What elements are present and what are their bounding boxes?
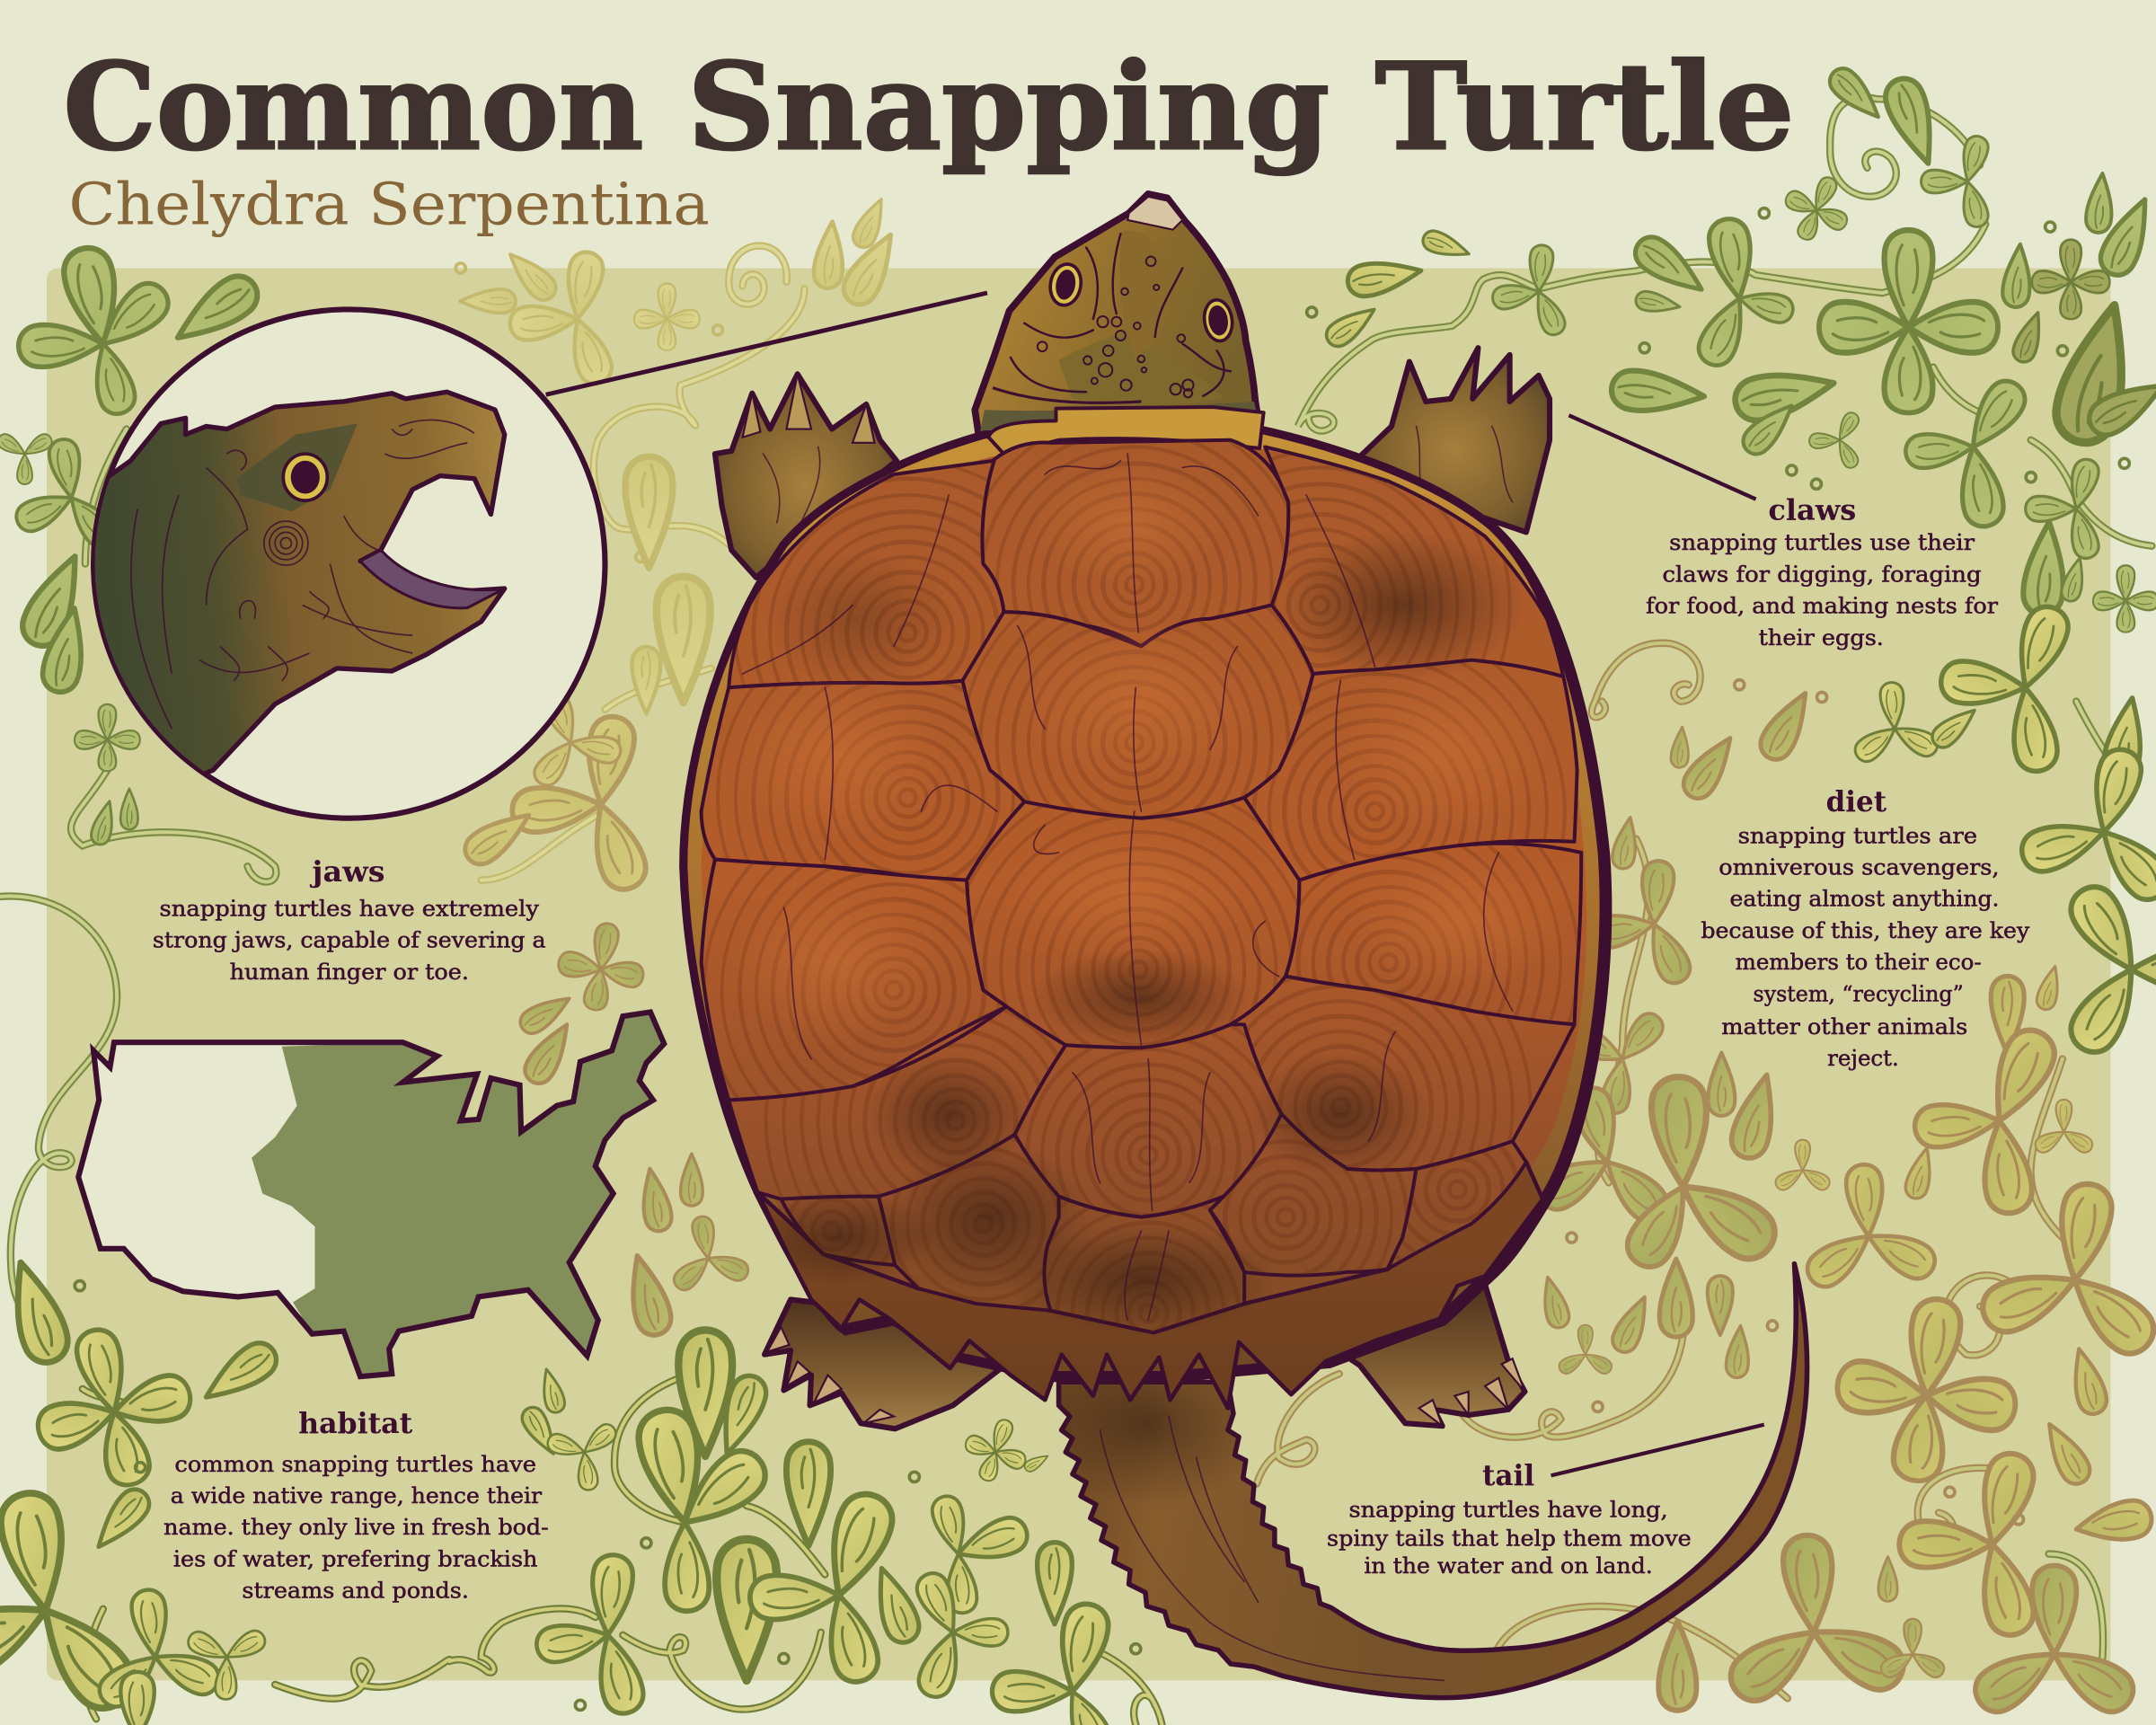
habitat range map xyxy=(78,1013,664,1376)
text block: claws xyxy=(1646,495,1999,650)
claws leader line xyxy=(1568,415,1756,500)
eye xyxy=(283,454,327,500)
text block: tail: in the water and on land. xyxy=(1364,1553,1653,1579)
shell rim xyxy=(684,429,1604,1376)
foliage: lower-left clovers xyxy=(0,916,1141,1725)
text block: tail: spiny tails that help them move xyxy=(1327,1526,1692,1551)
tail leader line xyxy=(1551,1425,1764,1475)
text block: habitat: streams and ponds. xyxy=(242,1579,469,1604)
title: Turtle xyxy=(1375,37,1794,177)
text block: habitat: a wide native range, hence their xyxy=(171,1483,543,1508)
text block: diet xyxy=(1701,786,2030,1071)
text block: claws: their eggs. xyxy=(1759,625,1884,650)
rear left leg xyxy=(764,1299,1001,1429)
text block: diet: matter other animals xyxy=(1721,1014,1967,1039)
front left leg xyxy=(715,374,897,578)
text block: claws: snapping turtles use their xyxy=(1669,530,1975,555)
text block: jaws xyxy=(153,856,546,985)
title: Snapping xyxy=(687,37,1330,177)
circle background xyxy=(93,309,605,818)
foliage: upper-left clovers xyxy=(0,195,905,902)
title: Common xyxy=(63,37,643,177)
text block: jaws: human finger or toe. xyxy=(230,960,469,985)
text block: claws: claws for digging, foraging xyxy=(1663,562,1982,587)
head wrinkles xyxy=(1011,234,1231,396)
map: native range xyxy=(252,1013,664,1376)
text block: habitat: name. they only live in fresh bod- xyxy=(163,1515,549,1540)
shell scutes xyxy=(642,394,1648,1503)
front right leg xyxy=(1358,348,1550,532)
skin details xyxy=(131,420,474,729)
text block: habitat: ies of water, prefering brackish xyxy=(173,1546,537,1571)
snout xyxy=(1127,197,1182,230)
side view of head xyxy=(95,390,507,774)
head top view xyxy=(975,194,1259,438)
text block: diet: system, “recycling” xyxy=(1754,981,1964,1006)
text block: diet: because of this, they are key xyxy=(1701,918,2030,943)
text block: tail: tail xyxy=(1482,1460,1534,1492)
title xyxy=(63,37,1794,177)
dark eye patch xyxy=(236,423,358,511)
text block: tail: snapping turtles have long, xyxy=(1349,1497,1668,1522)
shell collar xyxy=(989,407,1264,454)
text block: tail xyxy=(1327,1460,1692,1579)
jaws detail circle xyxy=(83,309,605,825)
turtle illustration xyxy=(642,194,1807,1698)
tail xyxy=(1031,1264,1807,1698)
text block: diet: eating almost anything. xyxy=(1730,887,2000,912)
foliage: upper-right clovers xyxy=(1307,63,2156,1126)
text block: diet: snapping turtles are xyxy=(1738,823,1977,848)
map: full USA xyxy=(78,1013,664,1376)
text block: jaws: snapping turtles have extremely xyxy=(160,896,540,921)
text block: diet: diet xyxy=(1826,786,1887,818)
text block: jaws: strong jaws, capable of severing a xyxy=(153,928,546,953)
open mouth xyxy=(360,550,505,608)
panel: inner backdrop xyxy=(47,268,2110,1680)
text block: claws: claws xyxy=(1768,495,1856,527)
text block: jaws: jaws xyxy=(309,856,385,889)
text block: diet: reject. xyxy=(1827,1046,1899,1071)
rear skirt overlay xyxy=(757,1162,1542,1408)
eyes xyxy=(1047,261,1084,307)
rear right leg xyxy=(1326,1285,1524,1426)
scales xyxy=(1038,256,1194,397)
shell inner base xyxy=(702,448,1586,1340)
text block: diet: members to their eco- xyxy=(1736,950,1982,975)
map: outline xyxy=(78,1013,664,1376)
jaws leader line xyxy=(546,293,987,394)
shell shadow xyxy=(687,432,1608,1378)
shell skirt xyxy=(757,1141,1542,1408)
text block: habitat: common snapping turtles have xyxy=(174,1452,536,1477)
text block: diet: omniverous scavengers, xyxy=(1719,854,2000,880)
shell growth lines xyxy=(743,454,1513,1320)
text block: habitat: habitat xyxy=(298,1408,413,1440)
subtitle: Chelydra Serpentina xyxy=(69,171,710,238)
text block: habitat xyxy=(163,1408,549,1604)
shell shading xyxy=(771,479,1525,1324)
text block: claws: for food, and making nests for xyxy=(1646,594,1999,619)
foliage: lower-right clovers xyxy=(1512,964,2156,1721)
